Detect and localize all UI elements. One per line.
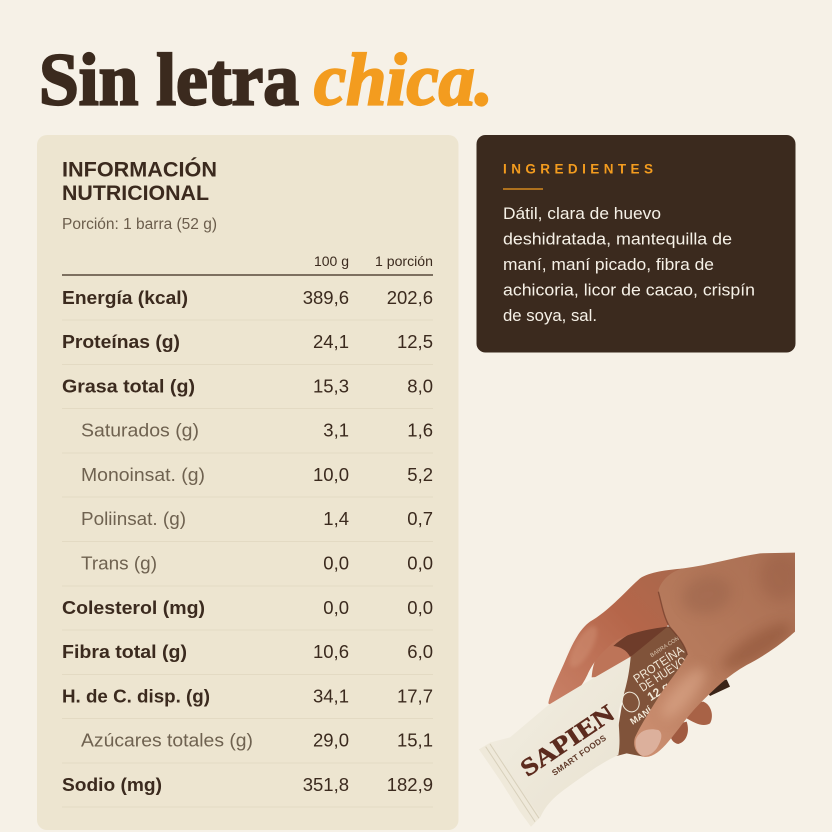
row: protein: Proteínas (g)	[62, 331, 180, 352]
row: carbohydrates	[62, 686, 433, 706]
panel: ingredients	[476, 135, 796, 352]
row: polyunsaturated: 1,4	[323, 508, 349, 529]
row: saturated: 1,6	[407, 420, 433, 440]
column headers: 100 g	[314, 254, 349, 269]
ingredients list: achicoria, licor de cacao, crispín	[503, 280, 755, 300]
row: total sugars: 15,1	[397, 730, 433, 750]
row: total sugars: Azúcares totales (g)	[81, 730, 253, 750]
row: trans	[81, 552, 433, 574]
row: carbohydrates: 17,7	[397, 686, 433, 706]
photo: hand holding protein bar	[479, 552, 795, 826]
bar label: 12 g	[645, 679, 672, 704]
column headers: 1 porción	[375, 254, 433, 269]
row: sodium	[62, 774, 433, 795]
row: sodium: 351,8	[303, 774, 349, 795]
row: fibre: Fibra total (g)	[62, 641, 187, 662]
egg icon	[619, 690, 642, 714]
ingredients list: deshidratada, mantequilla de	[503, 230, 732, 248]
row: polyunsaturated: 0,7	[407, 508, 433, 529]
panel: nutrition information	[37, 135, 458, 830]
row: protein: 12,5	[397, 331, 433, 352]
row: energy	[62, 287, 433, 308]
row: sodium: Sodio (mg)	[62, 774, 162, 795]
row: fibre: 6,0	[407, 641, 433, 662]
heading: nutrition information: INFORMACIÓN	[62, 156, 217, 182]
title: Sin letra	[39, 40, 299, 122]
row: protein: 24,1	[313, 331, 349, 352]
row: total fat	[62, 376, 433, 396]
row: energy: 389,6	[303, 287, 349, 308]
row: total fat: 15,3	[313, 376, 349, 396]
ingredients list: de soya, sal.	[503, 306, 597, 325]
row: monounsaturated	[81, 464, 433, 485]
column headers	[314, 254, 433, 269]
title: chica.	[314, 40, 493, 122]
row: energy: 202,6	[387, 287, 433, 308]
ingredients list	[503, 204, 755, 325]
row: polyunsaturated	[81, 508, 433, 529]
serving size: Porción: 1 barra (52 g)	[62, 216, 217, 233]
row: total sugars: 29,0	[313, 730, 349, 750]
row: monounsaturated: Monoinsat. (g)	[81, 464, 205, 485]
row: monounsaturated: 5,2	[407, 464, 433, 485]
ingredients list: Dátil, clara de huevo	[503, 204, 661, 223]
row: trans: Trans (g)	[81, 552, 157, 574]
brand wordmark: SAPIEN	[516, 700, 620, 782]
row: cholesterol: 0,0	[407, 597, 433, 618]
row: saturated	[81, 420, 433, 440]
brand subtitle: SMART FOODS	[550, 732, 608, 778]
row: total fat: 8,0	[407, 376, 433, 396]
bar label: BARRA CON	[649, 636, 681, 659]
row: fibre	[62, 641, 433, 662]
row: monounsaturated: 10,0	[313, 464, 349, 485]
row: saturated: Saturados (g)	[81, 420, 199, 440]
ingredients list: maní, maní picado, fibra de	[503, 255, 714, 274]
heading: nutrition information	[62, 156, 217, 205]
row: total fat: Grasa total (g)	[62, 376, 195, 396]
row: protein	[62, 331, 433, 352]
protein bar wrapper	[479, 627, 690, 827]
row: cholesterol	[62, 597, 433, 618]
bar label: MANÍ	[628, 705, 654, 727]
bar label: DE HUEVO	[637, 654, 689, 695]
row: polyunsaturated: Poliinsat. (g)	[81, 508, 186, 529]
row: fibre: 10,6	[313, 641, 349, 662]
row: sodium: 182,9	[387, 774, 433, 795]
heading: nutrition information: NUTRICIONAL	[62, 181, 209, 205]
thumb and palm	[634, 552, 795, 757]
ingredients heading: INGREDIENTES	[503, 162, 653, 176]
bar label	[628, 636, 689, 727]
row: cholesterol: 0,0	[323, 597, 349, 618]
row: saturated: 3,1	[323, 420, 349, 440]
bar label: PROTEÍNA	[630, 642, 686, 686]
row: trans: 0,0	[323, 552, 349, 574]
hand behind the bar	[548, 568, 730, 744]
row: carbohydrates: H. de C. disp. (g)	[62, 686, 210, 706]
row: cholesterol: Colesterol (mg)	[62, 597, 205, 618]
row: energy: Energía (kcal)	[62, 287, 188, 308]
row: trans: 0,0	[407, 552, 433, 574]
title	[39, 40, 493, 122]
row: total sugars	[81, 730, 433, 750]
row: carbohydrates: 34,1	[313, 686, 349, 706]
